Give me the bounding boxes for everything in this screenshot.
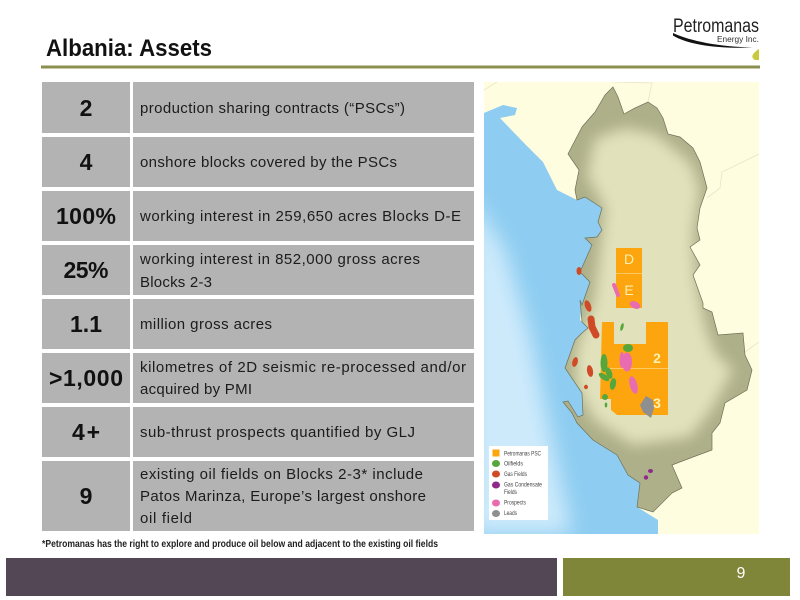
sea (484, 105, 658, 534)
row: 9 oil fields: oil field (140, 510, 192, 527)
row: 9 oil fields: 9 (80, 483, 92, 509)
neighbouring borders (484, 82, 759, 352)
block: D and E: E (624, 282, 634, 298)
legend: Gas Fields: Gas Fields (504, 471, 528, 478)
legend: Petromanas PSC: Petromanas PSC (504, 450, 541, 458)
gas fields (571, 267, 596, 389)
row: >1,000 km seismic (42, 353, 474, 403)
block: D and E (616, 248, 642, 308)
row: 4 onshore blocks: onshore blocks covered by the PSCs (140, 154, 397, 171)
row: 4 onshore blocks: 4 (80, 149, 93, 175)
row: 4 onshore blocks (42, 137, 474, 187)
row: 2 PSCs: 2 (80, 95, 92, 121)
legend (489, 446, 548, 520)
legend: Gas Condensate Fields (492, 482, 542, 494)
row: 25% working interest: 25% (64, 257, 108, 283)
title rule (41, 66, 760, 68)
page number panel: 9 (737, 565, 746, 582)
logo: Petromanas Energy Inc.: Energy Inc. (717, 34, 759, 44)
row: 2 PSCs: production sharing contracts (“PSCs”) (140, 100, 405, 117)
Albania land (563, 87, 752, 512)
row: 4+ prospects (42, 407, 474, 457)
block: D and E: D (624, 251, 634, 267)
legend: Prospects: Prospects (504, 500, 527, 506)
legend: Leads: Leads (504, 510, 518, 517)
page number panel (563, 558, 790, 596)
footer bar (6, 558, 557, 596)
row: 100% working interest: working interest in 259,650 acres Blocks D-E (139, 208, 461, 225)
legend: Oilfields: Oilfields (504, 460, 524, 468)
row: 1.1 million gross acres: 1.1 (70, 311, 102, 337)
row: 1.1 million gross acres: million gross acres (140, 316, 272, 333)
leads (640, 396, 654, 418)
legend: Gas Condensate Fields: Fields (504, 489, 518, 496)
footnote: *Petromanas has the right to explore and produce oil below and adjacent to the existing oil fields (42, 538, 438, 550)
block: 2 and 3 (600, 322, 668, 415)
oilfields (597, 323, 633, 408)
prospects (614, 285, 641, 395)
map of Albania (470, 82, 759, 534)
row: 2 PSCs (42, 82, 474, 133)
map background (484, 82, 759, 534)
row: 4+ prospects: 4+ (72, 419, 100, 445)
row: 100% working interest (42, 191, 474, 241)
row: 9 oil fields (42, 461, 474, 531)
row: >1,000 km seismic: kilometres of 2D seismic re-processed and/or (140, 359, 466, 376)
title: Albania: Assets (46, 35, 212, 62)
row: >1,000 km seismic: acquired by PMI (140, 381, 252, 398)
row: >1,000 km seismic: >1,000 (49, 365, 123, 391)
row: 4+ prospects: sub-thrust prospects quantified by GLJ (140, 424, 415, 441)
row: 100% working interest: 100% (56, 203, 116, 229)
legend: Gas Condensate Fields: Gas Condensate (504, 482, 542, 488)
row: 9 oil fields: Patos Marinza, Europe’s largest onshore (140, 488, 426, 505)
block: 2 and 3: 2 (653, 350, 661, 366)
row: 25% working interest (42, 245, 474, 295)
row: 25% working interest: working interest in 852,000 gross acres (139, 251, 420, 268)
assets table (42, 82, 474, 531)
block: 2 and 3: 3 (653, 395, 661, 411)
logo: Petromanas Energy Inc. (673, 16, 759, 60)
logo: Petromanas Energy Inc.: Petromanas (673, 16, 759, 37)
gas condensate fields (644, 469, 653, 480)
row: 25% working interest: Blocks 2-3 (140, 274, 212, 291)
row: 9 oil fields: existing oil fields on Blocks 2-3* include (140, 466, 423, 483)
row: 1.1 million gross acres (42, 299, 474, 349)
